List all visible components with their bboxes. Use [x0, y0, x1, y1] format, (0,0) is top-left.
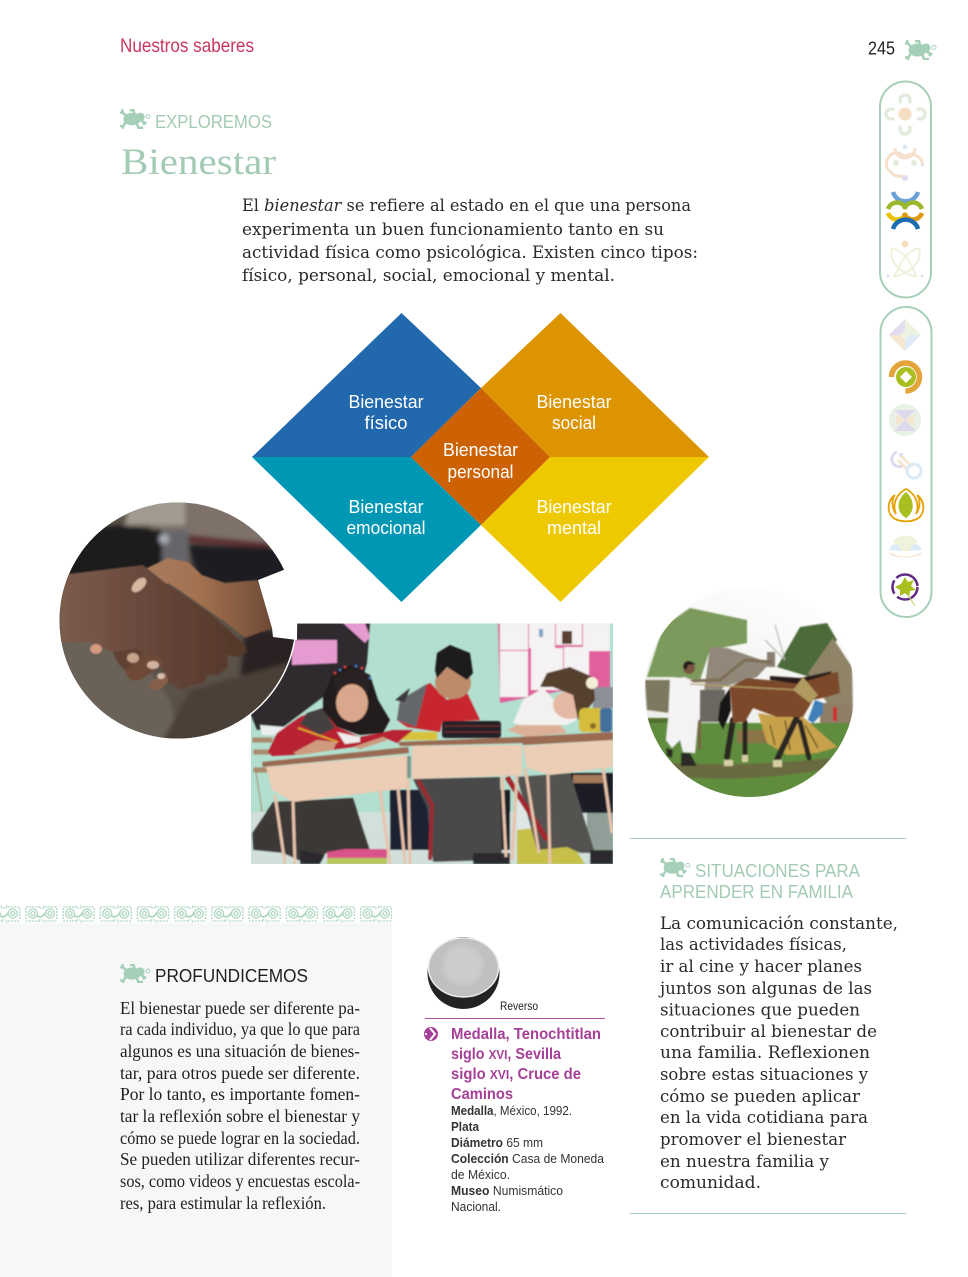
- icon: orange ring with green centre: [892, 363, 920, 391]
- photo: handshake: [55, 495, 300, 745]
- girl three: [593, 687, 613, 708]
- text block: Profundicemos: ra cada individuo, ya que lo que para: [120, 1019, 360, 1039]
- medal details: Plata: [451, 1120, 480, 1134]
- text block: Profundicemos: sos, como videos y encuestas escola-: [120, 1171, 360, 1191]
- text block: Situaciones: sobre estas situaciones y: [660, 1065, 868, 1085]
- text block: Profundicemos: tar, para otros puede ser diferente.: [120, 1063, 360, 1083]
- medal title: siglo XVI, Cruce de: [451, 1066, 581, 1083]
- medal details: Colección Casa de Moneda: [451, 1152, 604, 1166]
- intro text: El bienestar se refiere al estado en el que una persona: [242, 196, 691, 216]
- medal title: [451, 1026, 601, 1103]
- icon: chevron bullet: [424, 1027, 438, 1041]
- page number with frog icon: 245: [868, 38, 895, 58]
- icon: pale fan: [889, 536, 922, 558]
- desks: [262, 747, 409, 767]
- diamond: Bienestar físico: físico: [364, 413, 408, 433]
- side navigation: pill 2: [880, 307, 932, 617]
- diamond: Bienestar emocional: [252, 457, 481, 602]
- diamond: Bienestar emocional: emocional: [346, 518, 426, 538]
- white cuff and gap behind wrist: [258, 560, 298, 640]
- black panel and notes: [250, 623, 370, 730]
- girl three trousers: [570, 773, 613, 813]
- text block: Profundicemos: Por lo tanto, es importante fomen-: [120, 1084, 360, 1104]
- intro text: experimenta un buen funcionamiento tanto en su: [242, 220, 664, 240]
- title: Bienestar: Bienestar: [121, 142, 276, 183]
- man: [698, 720, 701, 750]
- text block: Situaciones: juntos son algunas de las: [658, 979, 872, 999]
- heading: Situaciones: [660, 858, 860, 902]
- text block: Situaciones: comunidad.: [660, 1173, 761, 1193]
- text block: Profundicemos: El bienestar puede ser diferente pa-: [120, 998, 360, 1018]
- diamond: Bienestar mental: mental: [547, 518, 601, 538]
- text block: Profundicemos: res, para estimular la reflexión.: [120, 1193, 326, 1213]
- diamond: Bienestar social: social: [552, 413, 596, 433]
- medal details: [451, 1104, 604, 1214]
- text block: Situaciones: cómo se pueden aplicar: [660, 1087, 861, 1107]
- caption: Reverso: Reverso: [500, 1001, 538, 1013]
- section heading: Exploremos: [120, 109, 272, 132]
- text block: Profundicemos: tar la reflexión sobre el bienestar y: [120, 1106, 360, 1126]
- icon: coloured interlocking arcs: [888, 192, 922, 229]
- icon: pale arcs: [886, 144, 924, 181]
- side navigation: pill 1: [880, 82, 931, 298]
- medal details: Nacional.: [451, 1200, 501, 1214]
- diamond: Bienestar social: [481, 313, 709, 457]
- icon: pale crossed square: [889, 404, 921, 436]
- boy trousers and dark area: [390, 790, 430, 850]
- text block: Situaciones: promover el bienestar: [660, 1130, 847, 1150]
- girl one: [268, 708, 413, 756]
- horse: [718, 688, 731, 730]
- photo: classroom: [250, 623, 613, 864]
- boy: [397, 683, 480, 732]
- text block: Situaciones: ir al cine y hacer planes: [660, 957, 862, 977]
- diamond: Bienestar social: Bienestar: [536, 392, 612, 412]
- bulletin board: [498, 623, 610, 703]
- medal title: Medalla, Tenochtitlan: [451, 1026, 601, 1043]
- heading: Situaciones: APRENDER EN FAMILIA: [660, 882, 853, 902]
- text block: Situaciones: La comunicación constante,: [660, 914, 898, 934]
- medal title: siglo XVI, Sevilla: [451, 1046, 561, 1063]
- diamond: Bienestar emocional: Bienestar: [348, 497, 424, 517]
- diamond: Bienestar personal: Bienestar: [443, 440, 518, 460]
- diamond: Bienestar físico: [252, 313, 481, 457]
- intro text: físico, personal, social, emocional y mental.: [242, 266, 615, 286]
- diamond: Bienestar personal: [411, 388, 550, 525]
- page number with frog icon: [868, 38, 936, 60]
- fingers: [113, 649, 143, 670]
- photo: silver medal: [428, 937, 500, 1009]
- text block: Profundicemos: cómo se puede lograr en la sociedad.: [120, 1128, 360, 1148]
- text block: Situaciones: en nuestra familia y: [660, 1152, 829, 1172]
- icon: purple ring with green splash: [892, 574, 918, 606]
- medal title: Caminos: [451, 1086, 513, 1103]
- medal details: Diámetro 65 mm: [451, 1136, 543, 1150]
- heading: Profundicemos: PROFUNDICEMOS: [155, 966, 308, 986]
- medal details: Medalla, México, 1992.: [451, 1104, 572, 1118]
- panel: Situaciones para aprender en familia: [630, 838, 906, 1214]
- right hand: [146, 558, 272, 638]
- chair at left: [253, 738, 272, 812]
- text block: Situaciones: las actividades físicas,: [660, 935, 847, 955]
- diagram: five types of wellbeing: [252, 313, 709, 602]
- diamond: Bienestar mental: Bienestar: [536, 497, 612, 517]
- text block: Situaciones: situaciones que pueden: [660, 1000, 860, 1020]
- heading: Situaciones: SITUACIONES PARA: [695, 861, 860, 881]
- icon: pale circles: [892, 452, 921, 478]
- text block: Profundicemos: algunos es una situación de bienes-: [120, 1041, 360, 1061]
- icon: pale diamond: [889, 319, 921, 351]
- intro text: [242, 196, 698, 286]
- left hand: [60, 565, 247, 690]
- section heading: Exploremos: EXPLOREMOS: [155, 112, 272, 132]
- photo: man leading horse: [644, 606, 854, 797]
- shoes and pencil case: [300, 850, 613, 864]
- text block: Profundicemos: Se pueden utilizar diferentes recur-: [120, 1149, 360, 1169]
- girl one trousers: [252, 798, 370, 864]
- text block: Situaciones: una familia. Reflexionen: [660, 1043, 870, 1063]
- text block: Situaciones: en la vida cotidiana para: [660, 1108, 868, 1128]
- text block: Profundicemos: [120, 998, 360, 1213]
- medal details: Museo Numismático: [451, 1184, 563, 1198]
- icon: pale sprout: [886, 240, 924, 278]
- icon: orange and green leaf: [889, 489, 923, 521]
- medal card rule: [425, 1018, 605, 1019]
- intro text: actividad física como psicológica. Existen cinco tipos:: [242, 243, 698, 263]
- diamond: Bienestar personal: personal: [448, 462, 514, 482]
- text block: Situaciones: contribuir al bienestar de: [660, 1022, 877, 1042]
- floor: [251, 812, 613, 864]
- text block: Situaciones: [658, 914, 898, 1193]
- running header: Nuestros saberes: Nuestros saberes: [120, 35, 254, 57]
- icon: pale flower: [886, 95, 925, 134]
- diamond: Bienestar mental: [481, 457, 709, 602]
- diamond: Bienestar físico: Bienestar: [348, 392, 424, 412]
- medal details: de México.: [451, 1168, 510, 1182]
- panel: Profundicemos background: [0, 905, 392, 1277]
